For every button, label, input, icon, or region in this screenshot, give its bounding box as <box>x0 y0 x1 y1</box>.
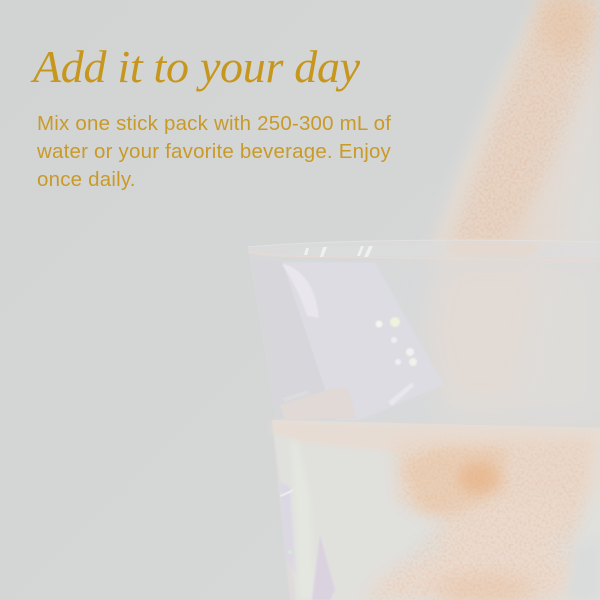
water with dissolving powder <box>272 420 600 600</box>
powder stream <box>425 0 600 420</box>
instructions text: water or your favorite beverage. Enjoy <box>37 140 391 163</box>
title: Add it to your day <box>33 41 360 92</box>
instructions text: once daily. <box>37 168 136 191</box>
instructions text: Mix one stick pack with 250-300 mL of <box>37 112 391 135</box>
left glass wall iridescence <box>272 420 296 600</box>
glass rim <box>248 240 600 258</box>
glass upper body <box>248 240 600 424</box>
sparkles <box>376 317 417 406</box>
instructions text <box>37 112 391 191</box>
